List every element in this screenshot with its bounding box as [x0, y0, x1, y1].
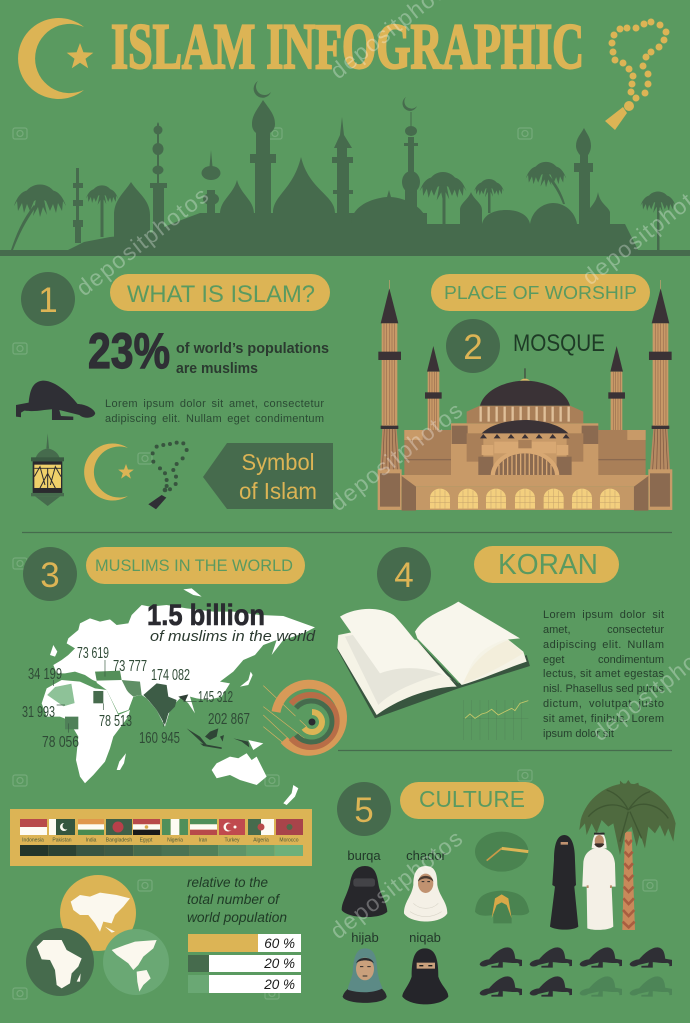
heading: muslims in the world: MUSLIMS IN THE WORLD	[95, 556, 293, 575]
text block: koran body: dictum, volutpat justo	[543, 698, 664, 710]
map caption: of muslims in the world	[150, 628, 316, 645]
text block: koran body: consectetur	[607, 624, 664, 636]
map numbers: 160 945	[139, 730, 180, 747]
section 4 number badge	[377, 547, 431, 601]
arrow label: symbol of islam	[203, 443, 333, 509]
garment labels	[347, 848, 447, 945]
watermarks: depositphotos	[71, 182, 213, 301]
bar chart: share of world population: 20 %	[263, 956, 295, 971]
heading: what is islam	[110, 274, 330, 311]
skyline silhouette	[0, 81, 690, 256]
circle: asia	[60, 875, 136, 951]
label: mosque: MOSQUE	[513, 330, 605, 357]
text block: koran body: condimentum	[598, 654, 664, 666]
illustration: open book	[337, 602, 530, 718]
garment labels: burqa	[347, 848, 381, 863]
flag labels: India	[86, 838, 97, 844]
mini line chart	[463, 700, 528, 740]
heading: koran: KORAN	[498, 549, 598, 581]
flag labels: Algeria	[253, 838, 269, 844]
icon: praying man	[16, 381, 95, 420]
section 2 number badge	[446, 319, 500, 373]
garment labels: niqab	[409, 930, 441, 945]
heading: muslims in the world	[86, 547, 305, 584]
icon: small crescent and star	[84, 444, 134, 500]
circle: americas	[103, 929, 169, 995]
population caption: world population	[187, 910, 287, 925]
section divider lines	[22, 532, 672, 750]
icon: burqa	[342, 866, 387, 917]
stat caption: are muslims	[176, 361, 258, 377]
bar chart: share of world population: 60 %	[264, 936, 295, 951]
section 5 number badge	[337, 782, 391, 836]
text block: koran body: amet,	[543, 624, 571, 636]
section 3 number badge: 3	[40, 556, 60, 595]
text block: koran body: ipsum dolor sit	[543, 728, 614, 740]
flag legend panel	[10, 809, 312, 866]
illustration: mosque	[378, 280, 672, 511]
arrow label: symbol of islam: Symbol	[242, 449, 314, 475]
icon: chador	[404, 866, 447, 921]
text block: koran body: sit amet, finibus. Lorem	[543, 713, 664, 725]
icon: niqab	[402, 948, 448, 1004]
stat caption: of world’s populations	[176, 341, 329, 357]
icon: hat shape	[475, 891, 529, 923]
garment labels: chador	[406, 848, 447, 863]
map numbers: 78 513	[99, 713, 132, 730]
icon: lantern	[31, 433, 64, 506]
heading: place of worship	[431, 274, 650, 311]
map numbers: 34 199	[28, 666, 62, 683]
watermark camera marks	[13, 128, 657, 999]
map numbers: 78 056	[42, 734, 79, 751]
population caption: relative to the	[187, 875, 268, 890]
figure: woman in abaya	[550, 835, 578, 930]
bar chart: share of world population	[188, 934, 301, 993]
figure: man in thobe	[582, 832, 616, 930]
heading: place of worship: PLACE OF WORSHIP	[444, 283, 637, 303]
stat caption	[176, 341, 329, 377]
flag labels: Morocco	[279, 838, 299, 844]
icon: pie shape	[475, 832, 528, 872]
heading: culture: CULTURE	[419, 786, 525, 812]
section 3 number badge	[23, 547, 77, 601]
icon: hijab	[343, 948, 387, 1003]
flag labels: Pakistan	[52, 838, 72, 844]
watermarks: depositphotos	[325, 397, 467, 516]
flag labels: Turkey	[224, 838, 240, 844]
section 1 number badge	[21, 272, 75, 326]
section 1 number badge: 1	[38, 281, 58, 320]
map numbers: 145 312	[198, 689, 233, 706]
flag labels	[22, 838, 299, 844]
icon: crescent and star	[18, 18, 93, 99]
map numbers: 202 867	[208, 711, 250, 728]
map headline: 1.5 billion: 1.5 billion	[147, 599, 265, 632]
circle: africa	[26, 928, 94, 996]
map numbers	[22, 645, 250, 751]
heading: what is islam: WHAT IS ISLAM?	[127, 281, 315, 308]
text block: koran body: eget	[543, 654, 564, 666]
text block: koran body	[543, 609, 664, 740]
stat: 23 percent: 23%	[88, 323, 170, 379]
heading: culture	[400, 782, 544, 819]
flags	[20, 819, 303, 835]
text block: koran body: adipiscing elit. Nullam	[543, 639, 664, 651]
radial ring chart	[276, 684, 343, 751]
section 5 number badge: 5	[354, 791, 374, 830]
flag labels: Iran	[199, 838, 208, 844]
text block: koran body: Lorem ipsum dolor sit	[543, 609, 664, 621]
illustration: date palm	[579, 780, 676, 930]
text block: section 1 body: Lorem ipsum dolor sit amet, consectetur	[105, 398, 324, 410]
icon: prayer beads gold	[605, 18, 670, 130]
text block: section 1 body	[105, 398, 324, 425]
map numbers: 73 777	[113, 658, 147, 675]
bar chart: share of world population: 20 %	[263, 977, 295, 992]
arrow label: symbol of islam: of Islam	[239, 478, 317, 504]
world map	[42, 588, 315, 805]
icon: prayer beads dark	[148, 441, 189, 509]
population caption	[187, 875, 287, 925]
section 2 number badge: 2	[463, 328, 483, 367]
watermarks: depositphotos	[325, 825, 467, 944]
heading: koran	[474, 546, 619, 583]
map numbers: 31 993	[22, 704, 55, 721]
map numbers: 174 082	[151, 667, 190, 684]
garment labels: hijab	[351, 930, 379, 945]
text block: koran body: nisl. Phasellus sed purus	[543, 683, 664, 695]
flag labels: Bangladesh	[106, 838, 132, 844]
colour scale	[20, 845, 303, 856]
population caption: total number of	[187, 892, 280, 907]
flag labels: Indonesia	[22, 838, 44, 844]
flag labels: Egypt	[140, 838, 153, 844]
text block: koran body: lectus, sit amet egestas	[543, 668, 664, 680]
section 4 number badge: 4	[394, 556, 414, 595]
flag labels: Nigeria	[167, 838, 183, 844]
pictogram: praying figures	[480, 947, 672, 997]
map numbers: 73 619	[77, 645, 109, 662]
text block: section 1 body: adipiscing elit. Nullam eget condimentum	[105, 413, 324, 425]
